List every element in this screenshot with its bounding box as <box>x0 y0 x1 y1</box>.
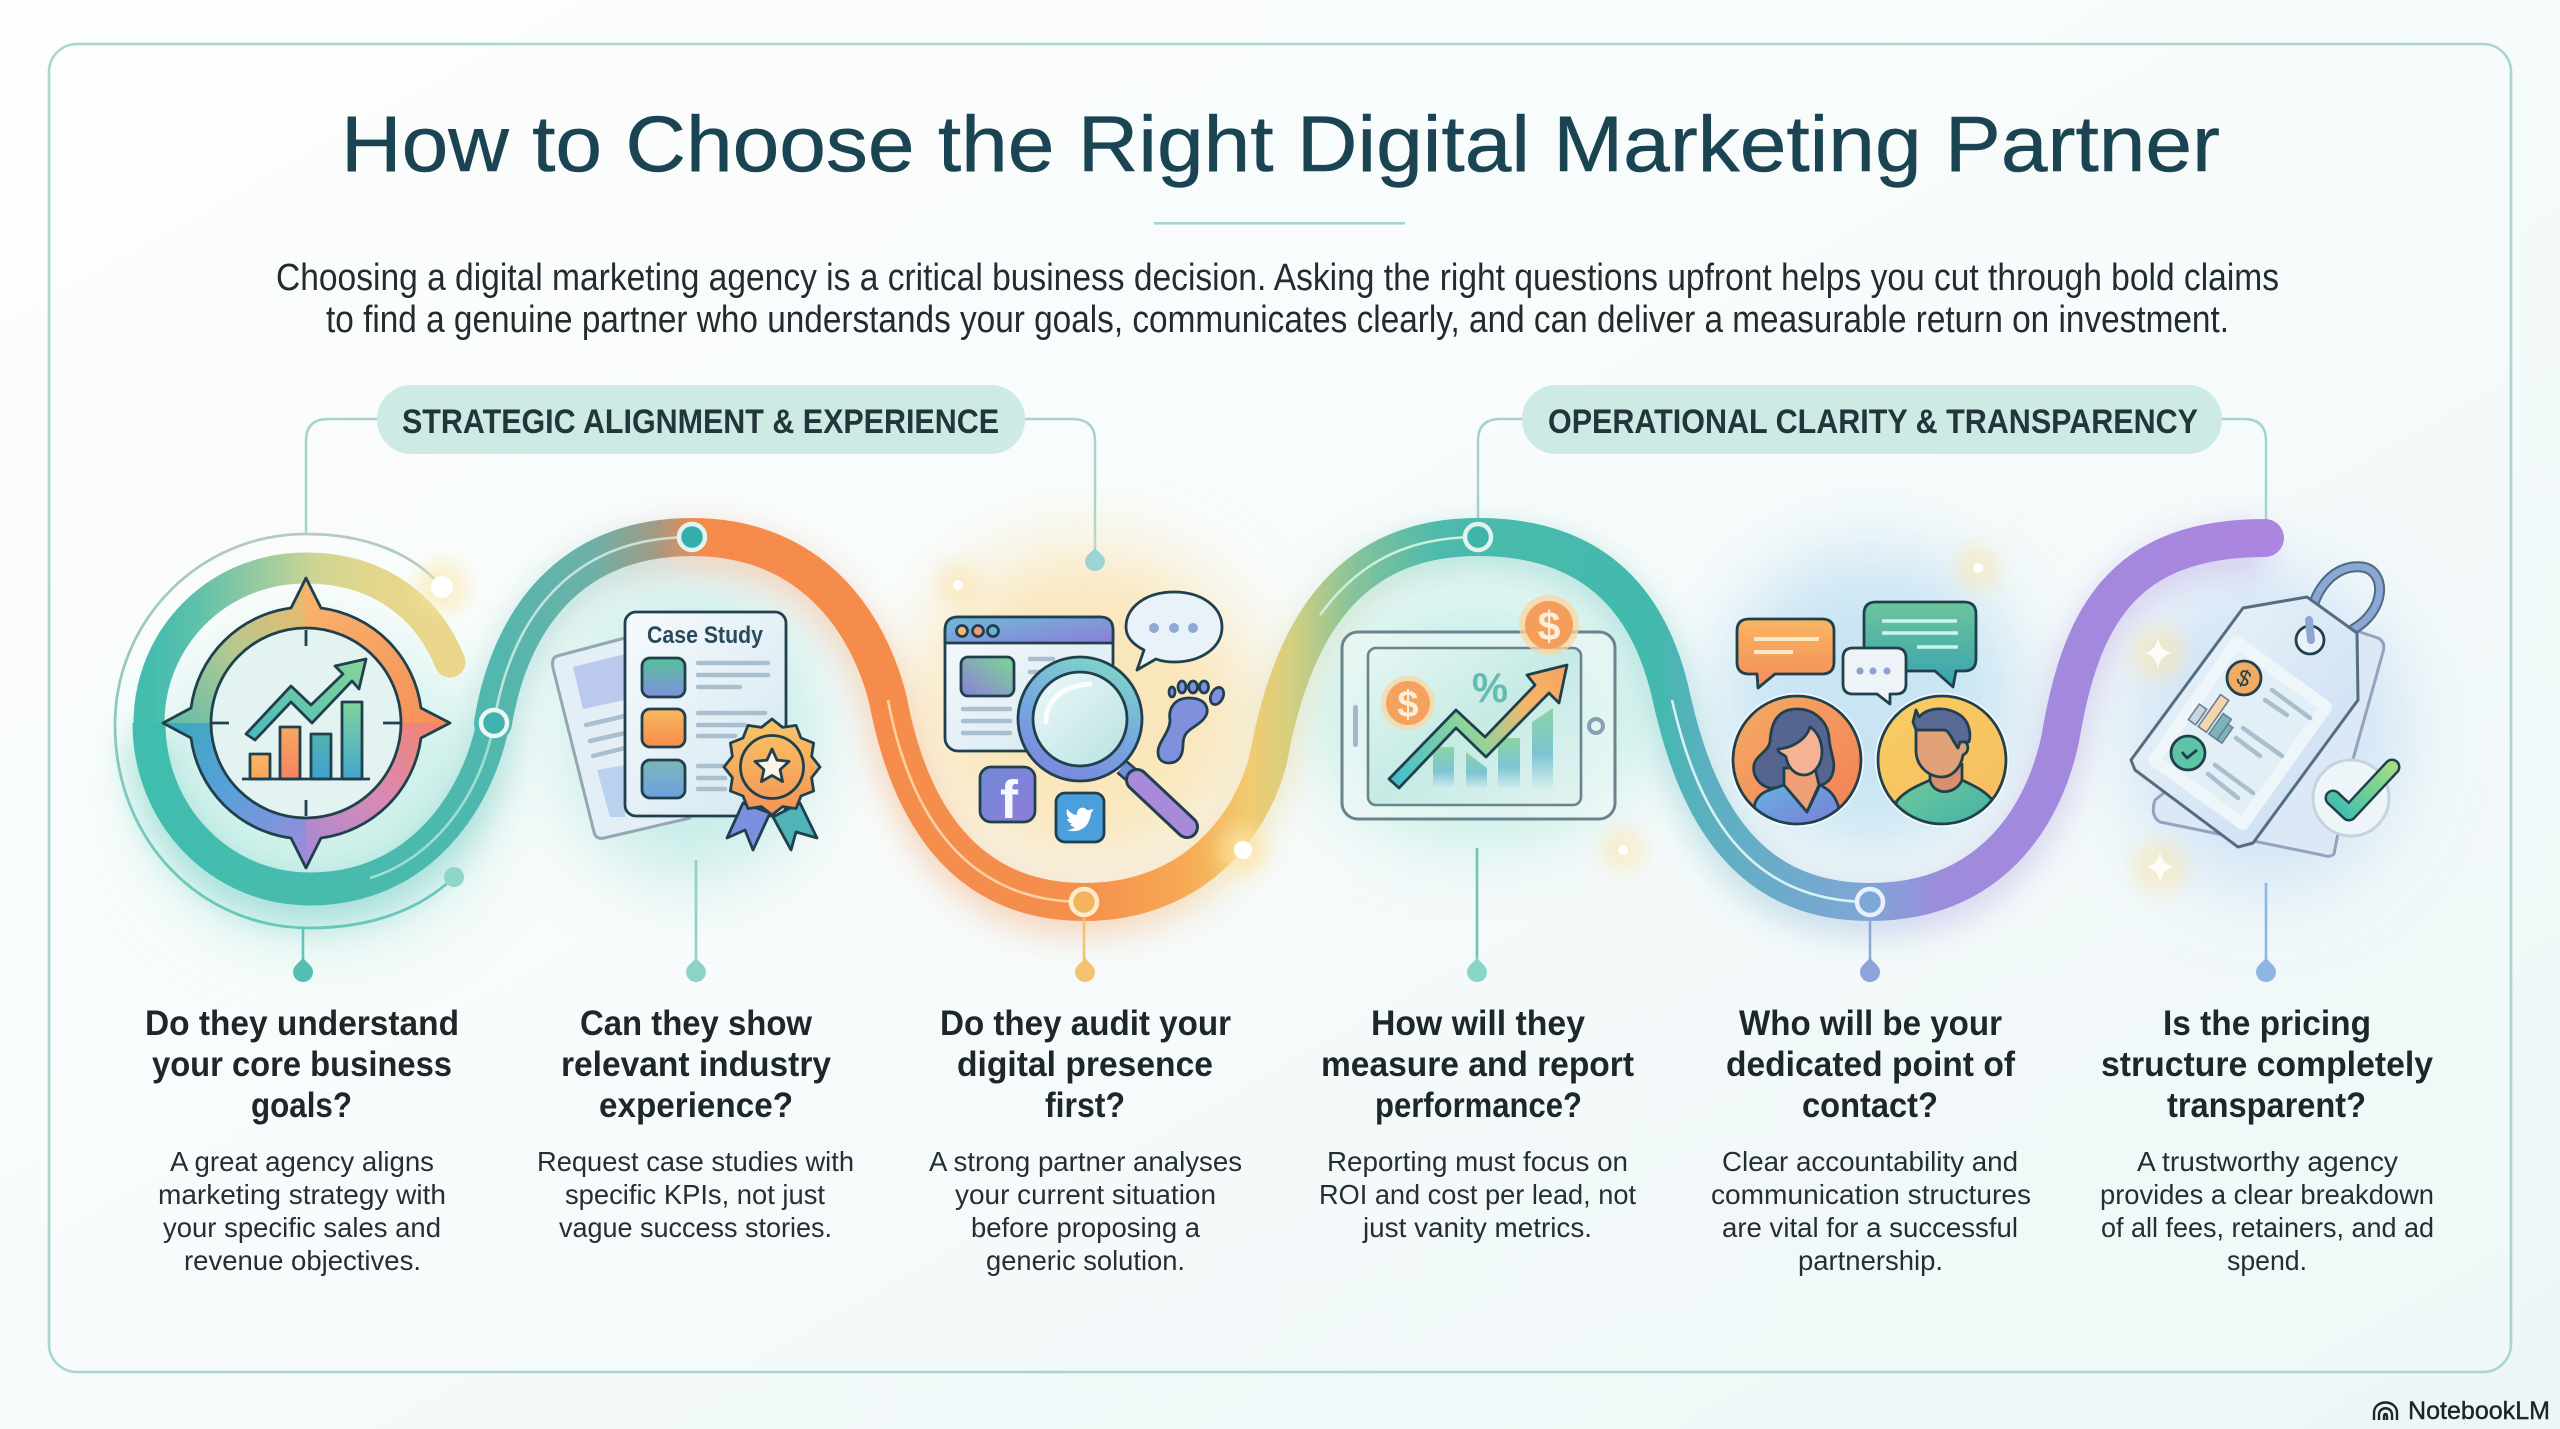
icon: transparent price tag with checkmark: $ <box>2233 664 2255 693</box>
column 3: digital presence audit: generic solution. <box>986 1245 1185 1276</box>
section pill: operational clarity <box>1522 385 2222 454</box>
icon: tablet showing performance report <box>1342 595 1615 819</box>
column 3: digital presence audit <box>929 1004 1242 1276</box>
column 5: point of contact: partnership. <box>1798 1245 1943 1276</box>
icon: compass with growth chart <box>163 578 450 868</box>
column 1: core business goals: Do they understand <box>145 1004 459 1043</box>
column 3: digital presence audit: Do they audit your <box>940 1004 1231 1043</box>
column 4: measuring performance: How will they <box>1371 1004 1586 1043</box>
column 2: industry experience: Request case studies with <box>537 1146 854 1177</box>
column 1: core business goals: revenue objectives. <box>184 1245 421 1276</box>
intro text: Choosing a digital marketing agency is a critical business decision. Asking the right questions upfront helps you cut through bold claims <box>276 257 2279 299</box>
column 6: transparent pricing <box>2100 1004 2434 1276</box>
column 4: measuring performance: measure and report <box>1321 1045 1634 1084</box>
column 2: industry experience: experience? <box>599 1086 793 1125</box>
column 5: point of contact: Who will be your <box>1739 1004 2002 1043</box>
column 2: industry experience: specific KPIs, not just <box>565 1179 825 1210</box>
icon: case study document with award badge <box>552 612 820 850</box>
icon: website audit with magnifying glass: f <box>1000 770 1019 830</box>
icon: tablet showing performance report: $ <box>1538 603 1561 649</box>
icon: transparent price tag with checkmark <box>2131 567 2392 856</box>
column 1: core business goals: goals? <box>251 1086 352 1125</box>
column 4: measuring performance <box>1319 1004 1636 1243</box>
column 6: transparent pricing: structure completely <box>2101 1045 2434 1084</box>
intro text: to find a genuine partner who understands your goals, communicates clearly, and can deliver a measurable return on investment. <box>326 299 2229 341</box>
icon: tablet showing performance report: % <box>1472 664 1508 711</box>
column 4: measuring performance: performance? <box>1375 1086 1582 1125</box>
pendant lines and teardrops <box>293 547 2276 982</box>
column 5: point of contact: contact? <box>1802 1086 1938 1125</box>
column 5: point of contact: are vital for a successful <box>1722 1212 2018 1243</box>
column 1: core business goals: your core business <box>152 1045 452 1084</box>
column 2: industry experience: vague success stories. <box>559 1212 832 1243</box>
column 2: industry experience <box>537 1004 854 1243</box>
thin orbit arc around first icon <box>115 534 468 928</box>
column 6: transparent pricing: transparent? <box>2167 1086 2366 1125</box>
icon: chat bubbles and two contacts <box>1730 602 2009 830</box>
column 3: digital presence audit: your current situation <box>955 1179 1216 1210</box>
column 2: industry experience: relevant industry <box>561 1045 831 1084</box>
section pill: strategic alignment <box>377 385 1025 454</box>
column 5: point of contact <box>1711 1004 2031 1276</box>
column 3: digital presence audit: before proposing a <box>971 1212 1200 1243</box>
icon: case study document with award badge: Case Study <box>647 622 764 649</box>
NotebookLM logo: NotebookLM <box>2408 1397 2550 1425</box>
winding gradient path ribbon <box>149 537 2265 914</box>
column 6: transparent pricing: spend. <box>2227 1245 2307 1276</box>
column 5: point of contact: dedicated point of <box>1726 1045 2015 1084</box>
intro text <box>276 257 2279 341</box>
column 1: core business goals: your specific sales and <box>163 1212 441 1243</box>
column 1: core business goals: A great agency aligns <box>170 1146 434 1177</box>
timeline nodes <box>481 524 1883 915</box>
column 4: measuring performance: Reporting must focus on <box>1327 1146 1628 1177</box>
column 4: measuring performance: just vanity metrics. <box>1362 1212 1592 1243</box>
connector lines from section pills <box>306 419 2266 560</box>
column 6: transparent pricing: Is the pricing <box>2163 1004 2371 1043</box>
column 1: core business goals: marketing strategy with <box>158 1179 446 1210</box>
column 3: digital presence audit: first? <box>1045 1086 1125 1125</box>
column 3: digital presence audit: A strong partner analyses <box>929 1146 1242 1177</box>
column 5: point of contact: Clear accountability and <box>1722 1146 2018 1177</box>
column 1: core business goals <box>145 1004 459 1276</box>
column 5: point of contact: communication structures <box>1711 1179 2031 1210</box>
column 3: digital presence audit: digital presence <box>957 1045 1213 1084</box>
title: How to Choose the Right Digital Marketing Partner <box>341 99 2220 188</box>
section pill: strategic alignment: STRATEGIC ALIGNMENT & EXPERIENCE <box>402 403 999 441</box>
soft colour glows behind icons <box>150 550 2405 940</box>
column 6: transparent pricing: of all fees, retainers, and ad <box>2101 1212 2434 1243</box>
column 2: industry experience: Can they show <box>580 1004 813 1043</box>
column 6: transparent pricing: provides a clear breakdown <box>2100 1179 2434 1210</box>
icon: website audit with magnifying glass <box>945 592 1226 842</box>
section pill: operational clarity: OPERATIONAL CLARITY & TRANSPARENCY <box>1548 403 2198 441</box>
sparkles <box>936 546 2186 893</box>
column 4: measuring performance: ROI and cost per lead, not <box>1319 1179 1636 1210</box>
icon: tablet showing performance report: $ <box>1397 684 1419 726</box>
column 6: transparent pricing: A trustworthy agency <box>2137 1146 2398 1177</box>
